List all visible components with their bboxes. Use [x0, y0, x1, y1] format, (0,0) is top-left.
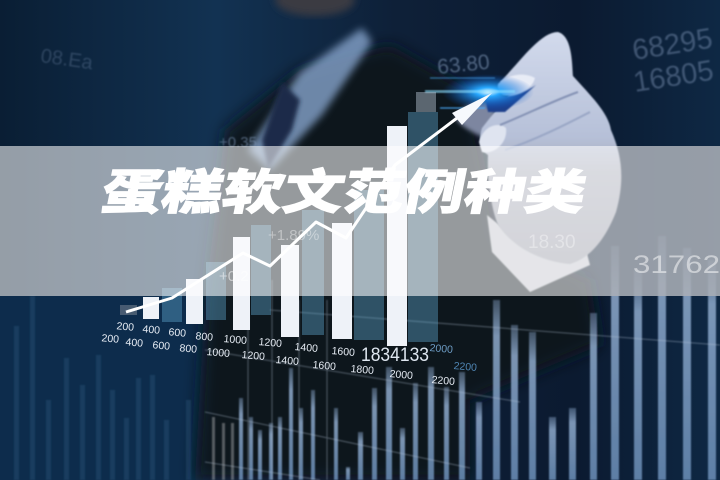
axis labels: 1600 — [312, 359, 337, 373]
axis labels: 2000 — [389, 368, 414, 382]
axis labels: 1200 — [258, 336, 283, 350]
axis labels: 400 — [125, 336, 144, 350]
bottom background bar chart — [14, 236, 720, 480]
hand holding pen — [455, 32, 621, 292]
axis labels: 2200 — [453, 360, 478, 374]
title: 蛋糕软文范例种类 — [97, 165, 591, 219]
axis labels: 600 — [168, 326, 187, 340]
axis labels: 400 — [142, 323, 161, 337]
faded background numbers: 63.80 — [436, 51, 491, 79]
axis labels: 1200 — [241, 349, 266, 363]
axis labels: 1400 — [294, 341, 319, 355]
faded band numbers: +1.89% — [268, 227, 319, 244]
axis labels — [101, 320, 478, 388]
dimming over tall right bars behind the band — [600, 146, 720, 296]
faded band numbers: 31762 — [633, 251, 720, 279]
faded background numbers — [39, 23, 716, 151]
axis labels: 2200 — [431, 374, 456, 388]
rising bar chart — [120, 92, 438, 346]
glow at pen tip — [425, 74, 534, 110]
translucent title band — [0, 146, 720, 296]
axis labels: 800 — [179, 342, 198, 356]
faded band numbers: +0.2 — [219, 268, 249, 285]
axis labels: 1600 — [331, 345, 356, 359]
value label: 1834133 — [361, 345, 429, 366]
white front bars — [143, 126, 407, 346]
axis labels: 1000 — [223, 333, 248, 347]
faded background numbers: 08.Ea — [39, 45, 95, 74]
translucent back bars — [120, 92, 438, 342]
axis labels: 1400 — [275, 354, 300, 368]
faded band numbers — [219, 227, 720, 285]
axis labels: 600 — [152, 339, 171, 353]
businessman silhouette — [195, 0, 600, 480]
axis labels: 1000 — [206, 346, 231, 360]
faded background numbers: 16805 — [631, 55, 716, 99]
axis labels: 800 — [195, 330, 214, 344]
faded background numbers: 68295 — [630, 23, 715, 67]
rising trend line with arrow — [126, 93, 492, 312]
faded background numbers: +0.35 — [219, 134, 257, 151]
axis labels: 200 — [101, 332, 120, 346]
grid lines — [205, 250, 720, 480]
axis labels: 200 — [116, 320, 135, 334]
axis labels: 1800 — [350, 363, 375, 377]
axis labels: 2000 — [429, 342, 454, 356]
faded band numbers: 18.30 — [528, 232, 576, 253]
